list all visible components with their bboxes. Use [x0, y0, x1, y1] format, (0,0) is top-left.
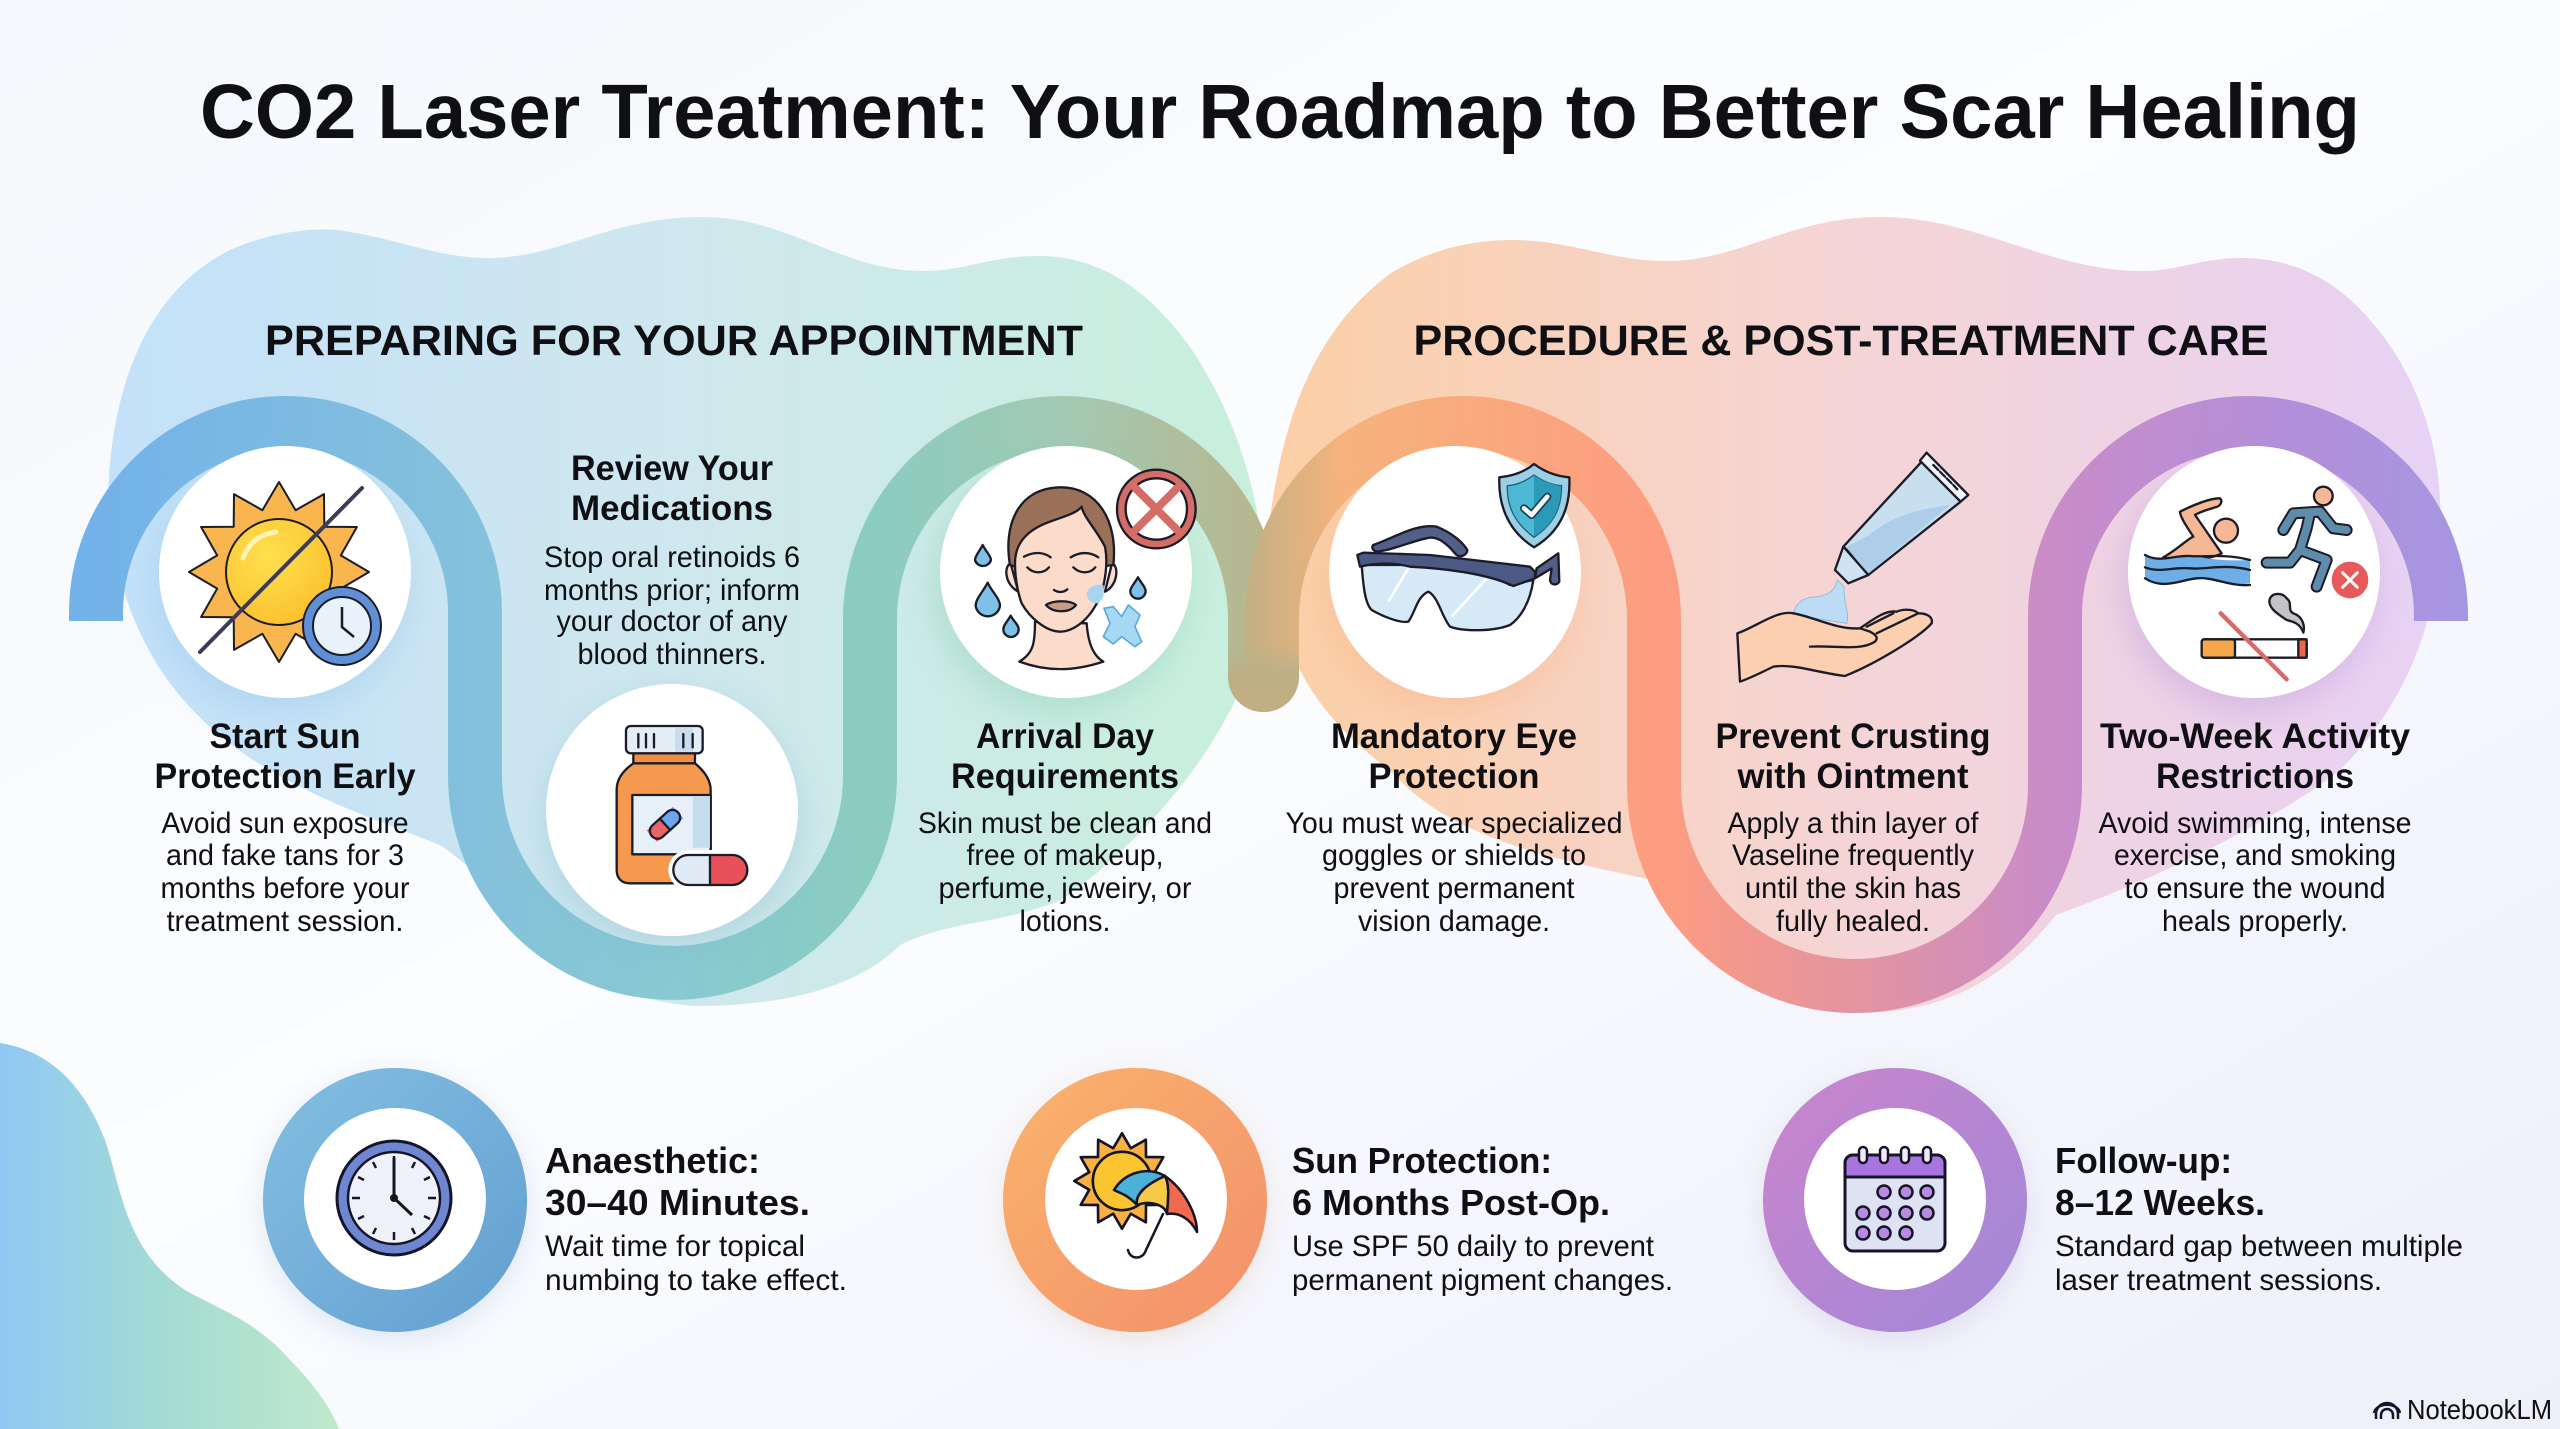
step 4 text: Protection: [1368, 757, 1540, 796]
decorative corner blob: [0, 1043, 339, 1429]
heading: preparing: PREPARING FOR YOUR APPOINTMENT: [265, 317, 1083, 365]
step 4 text: [1286, 717, 1622, 938]
step 6 text: exercise, and smoking: [2114, 839, 2396, 872]
flow ribbon: preparing: [96, 423, 1255, 973]
stat text: follow-up: [2055, 1140, 2463, 1297]
stat: sun protection: [1003, 1068, 1673, 1338]
step 5 text: Apply a thin layer of: [1728, 807, 1979, 840]
step 4 text: goggles or shields to: [1322, 839, 1586, 872]
step 6: activity restrictions: [2098, 446, 2412, 938]
stat text: sun protection: permanent pigment changes.: [1292, 1264, 1673, 1297]
stat text: sun protection: Sun Protection:: [1292, 1140, 1552, 1181]
step 1 text: Start Sun: [210, 717, 360, 756]
step 6 text: Restrictions: [2156, 757, 2354, 796]
icon: swimmer, runner, crossed cigarette: [2145, 487, 2368, 679]
step 1: start sun protection: [152, 446, 416, 938]
step 1 text: treatment session.: [166, 905, 404, 938]
stat text: follow-up: laser treatment sessions.: [2055, 1264, 2382, 1297]
title: CO2 Laser Treatment: Your Roadmap to Better Scar Healing: [200, 69, 2360, 155]
icon: clean face with no-makeup sign: [975, 470, 1196, 669]
step 5 text: Vaseline frequently: [1732, 839, 1974, 872]
icon: sun and umbrella: [1074, 1133, 1197, 1258]
step 6 text: [2098, 717, 2412, 938]
panel: preparing backdrop blob: [108, 217, 1262, 1006]
step 4 text: Mandatory Eye: [1331, 717, 1577, 756]
stat text: anaesthetic: numbing to take effect.: [545, 1264, 847, 1297]
icon: safety goggles and shield: [1357, 464, 1569, 630]
step 3 text: Requirements: [951, 757, 1179, 796]
step 3 text: Skin must be clean and: [918, 807, 1212, 840]
step 3 text: lotions.: [1020, 905, 1110, 938]
stat: follow-up: [1763, 1068, 2463, 1338]
step 4 text: prevent permanent: [1334, 872, 1574, 905]
stat text: sun protection: 6 Months Post-Op.: [1292, 1182, 1610, 1223]
icon: ointment tube over open hand: [1737, 453, 1968, 682]
step 5 text: [1716, 717, 1990, 938]
step 2 text: Medications: [571, 489, 773, 528]
step 4: mandatory eye protection: [1286, 446, 1622, 938]
step 6 text: to ensure the wound: [2124, 872, 2386, 905]
step 2 text: blood thinners.: [578, 638, 766, 671]
flow ribbon: procedure: [1272, 423, 2441, 986]
step 5 text: fully healed.: [1776, 905, 1930, 938]
stat text: anaesthetic: Anaesthetic:: [545, 1140, 760, 1181]
stat text: anaesthetic: 30–40 Minutes.: [545, 1182, 810, 1223]
step 3 text: Arrival Day: [976, 717, 1155, 756]
ribbon joint: rounded end where the two ribbons meet: [1228, 625, 1299, 712]
stat text: follow-up: Follow-up:: [2055, 1140, 2232, 1181]
icon: crossed sun with clock: [189, 482, 381, 665]
stat: anaesthetic: [263, 1068, 847, 1338]
step 1 text: Protection Early: [154, 757, 416, 796]
step 1 text: Avoid sun exposure: [162, 807, 408, 840]
stat text: follow-up: 8–12 Weeks.: [2055, 1182, 2265, 1223]
step 2 text: your doctor of any: [556, 605, 788, 638]
step 3 text: perfume, jeweiry, or: [938, 872, 1192, 905]
step 1 text: [154, 717, 416, 938]
panel: procedure backdrop blob: [1268, 217, 2441, 1013]
step 2 text: Review Your: [571, 449, 773, 488]
stat text: sun protection: [1292, 1140, 1673, 1297]
step 3 text: [918, 717, 1212, 938]
stat text: anaesthetic: [545, 1140, 847, 1297]
step 6 text: heals properly.: [2162, 905, 2348, 938]
stat text: follow-up: Standard gap between multiple: [2055, 1230, 2463, 1263]
heading: procedure: PROCEDURE & POST-TREATMENT CARE: [1414, 317, 2268, 365]
step 2 text: [544, 449, 800, 671]
step 2: review medications: [544, 449, 800, 949]
step 3 text: free of makeup,: [966, 839, 1164, 872]
step 5 text: Prevent Crusting: [1716, 717, 1990, 756]
icon: pill bottle and capsule: [617, 726, 752, 890]
step 1 text: months before your: [160, 872, 410, 905]
stat text: sun protection: Use SPF 50 daily to prevent: [1292, 1230, 1654, 1263]
step 6 text: Avoid swimming, intense: [2098, 807, 2412, 840]
stat text: anaesthetic: Wait time for topical: [545, 1230, 805, 1263]
icon: clock: [337, 1141, 451, 1255]
step 4 text: You must wear specialized: [1286, 807, 1622, 840]
step 2 text: months prior; inform: [544, 574, 800, 607]
step 3: arrival day: [918, 446, 1212, 938]
icon: calendar: [1845, 1147, 1945, 1251]
step 4 text: vision damage.: [1358, 905, 1550, 938]
step 2 text: Stop oral retinoids 6: [544, 541, 800, 574]
step 5 text: with Ointment: [1737, 757, 1969, 796]
step 5: prevent crusting: [1716, 453, 1990, 938]
step 1 text: and fake tans for 3: [166, 839, 404, 872]
step 6 text: Two-Week Activity: [2100, 717, 2411, 756]
step 5 text: until the skin has: [1745, 872, 1961, 905]
